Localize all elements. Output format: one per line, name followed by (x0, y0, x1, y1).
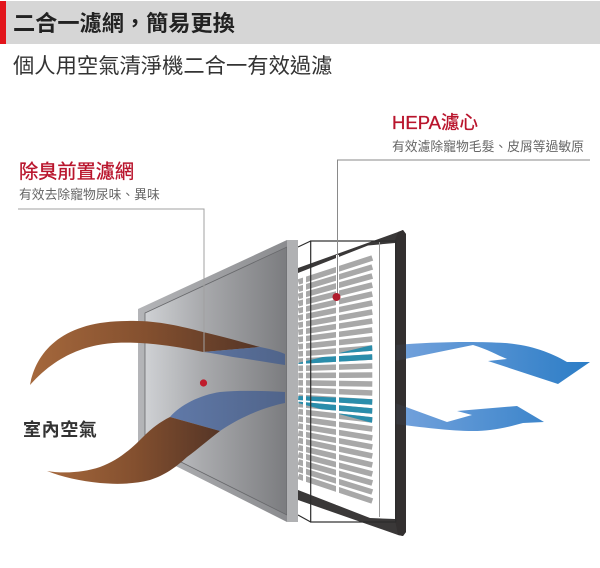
indoor air label: 室內空氣 (23, 419, 97, 440)
panel outer edge (138, 240, 287, 522)
pre-filter callout (19, 161, 160, 202)
teal air streaks (298, 348, 372, 420)
pre-filter panel (138, 240, 298, 522)
leader line: pre-filter (18, 209, 204, 352)
pre-filter heading: 除臭前置濾網 (19, 161, 134, 183)
HEPA filter callout (392, 112, 584, 154)
filter stripes (298, 258, 372, 501)
frame back plate (298, 230, 406, 536)
subtitle: 個人用空氣清淨機二合一有效過濾 (13, 54, 332, 78)
pre-filter description: 有效去除寵物尿味、異味 (19, 187, 160, 202)
filter white sheet (298, 243, 395, 519)
HEPA filter frame (298, 230, 406, 536)
header title: 二合一濾網，簡易更換 (13, 11, 235, 36)
HEPA description: 有效濾除寵物毛髮、皮屑等過敏原 (392, 139, 584, 154)
leader line: HEPA (338, 160, 590, 296)
outgoing clean air arrow: upper (395, 342, 590, 384)
panel face (145, 247, 287, 515)
upper air ribbon: filtered (203, 347, 285, 365)
upper air ribbon: brown (30, 321, 260, 385)
HEPA heading: HEPA濾心 (392, 112, 478, 133)
panel side edge (287, 240, 298, 522)
lower air ribbon: brown (47, 417, 220, 484)
header bar (0, 1, 600, 44)
column gaps (303, 255, 339, 505)
HEPA front outline (298, 241, 396, 522)
outgoing clean air arrow: lower (395, 403, 544, 431)
lower air ribbon: filtered (170, 391, 285, 431)
frame right bar (395, 230, 406, 536)
marker dot: HEPA (332, 293, 340, 301)
marker dot: pre-filter (200, 379, 207, 387)
panel inner line (145, 247, 287, 515)
